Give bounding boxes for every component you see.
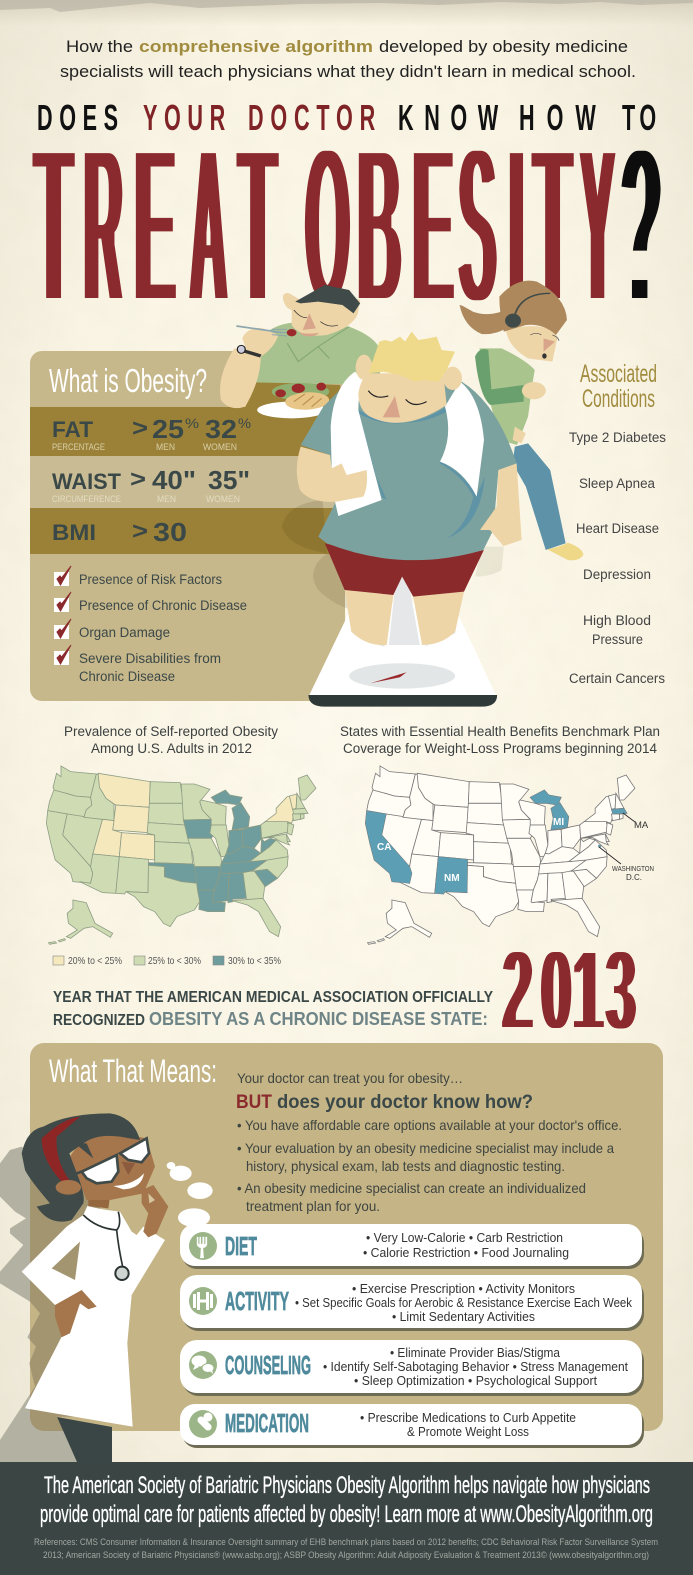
text: COUNSELING (225, 1350, 311, 1380)
intro text: specialists will teach physicians what they didn't learn in medical school. (60, 62, 636, 81)
associated conditions list: Type 2 Diabetes (569, 430, 666, 445)
map title right: Coverage for Weight-Loss Programs beginning 2014 (343, 741, 657, 756)
state labels: D.C. (626, 873, 642, 882)
card details: & Promote Weight Loss (407, 1424, 529, 1439)
explanation text: treatment plan for you. (246, 1198, 380, 1214)
headline: does your doctor know how to: DOES (37, 98, 118, 138)
state labels: WASHINGTON (612, 866, 654, 873)
figure shadows (282, 500, 504, 610)
big title: treat obesity (35, 99, 662, 353)
man eating (220, 285, 380, 418)
row: fat percentage: % (185, 415, 199, 431)
scale (308, 577, 497, 707)
state labels: NM (444, 873, 460, 884)
card details: • Set Specific Goals for Aerobic & Resistance Exercise Each Week (295, 1295, 632, 1310)
headline: does your doctor know how to: KNOW (398, 98, 498, 138)
row: bmi: BMI (52, 520, 96, 545)
icon: pills (196, 1412, 213, 1432)
footer message (40, 1472, 653, 1528)
icon: dumbbell (193, 1292, 213, 1310)
intro text: How the (66, 37, 133, 56)
doctor head (22, 1113, 168, 1237)
big title: treat obesity: T (35, 99, 72, 353)
card details: • Sleep Optimization • Psychological Support (354, 1373, 597, 1388)
big title: treat obesity: I (510, 99, 523, 353)
headline: does your doctor know how to: YOUR (143, 98, 225, 138)
row: bmi (52, 517, 187, 547)
row: waist circumference: WOMEN (206, 494, 240, 504)
map title left: Among U.S. Adults in 2012 (91, 741, 252, 756)
checklist (54, 566, 247, 684)
map title left: Prevalence of Self-reported Obesity (64, 724, 278, 739)
big title: treat obesity: B (358, 99, 401, 353)
map title right (340, 724, 660, 756)
legend: 20% to < 25% (68, 955, 122, 967)
explanation text: • An obesity medicine specialist can create an individualized (237, 1180, 586, 1196)
card: diet (180, 1224, 644, 1269)
footer banner (0, 1462, 693, 1575)
year statement: YEAR THAT THE AMERICAN MEDICAL ASSOCIATION OFFICIALLY (53, 989, 494, 1006)
big title: treat obesity: R (84, 99, 122, 353)
map: obesity prevalence by state (46, 766, 316, 944)
state labels: CA (377, 842, 391, 853)
card: counseling (180, 1340, 644, 1396)
associated conditions list: High Blood (583, 613, 651, 628)
doctor legs (57, 1417, 112, 1462)
checklist: Severe Disabilities from (79, 651, 221, 666)
associated conditions list: Certain Cancers (569, 671, 665, 686)
headline: does your doctor know how to: HOW (519, 98, 596, 138)
checklist: Presence of Chronic Disease (79, 598, 247, 613)
explanation text: • Your evaluation by an obesity medicine specialist may include a (237, 1140, 614, 1156)
checklist: Chronic Disease (79, 669, 175, 684)
legend (53, 955, 281, 967)
row: fat percentage (52, 414, 251, 452)
year statement: OBESITY AS A CHRONIC DISEASE STATE: (149, 1009, 488, 1029)
doctor shadow (0, 1147, 100, 1462)
big title: treat obesity: E (135, 99, 175, 353)
associated conditions list (569, 360, 666, 686)
card labels (225, 1231, 311, 1438)
man on scale: torso, towel and head (297, 332, 522, 560)
row: waist circumference: 40" (152, 465, 196, 495)
icon: speech bubbles (192, 1356, 214, 1374)
headline: does your doctor know how to (37, 98, 656, 138)
stethoscope (83, 1212, 129, 1280)
intro text: comprehensive algorithm (139, 37, 373, 56)
panel: what that means (30, 1043, 663, 1431)
card details: • Calorie Restriction • Food Journaling (363, 1245, 569, 1260)
card details: • Exercise Prescription • Activity Monitors (352, 1281, 575, 1296)
big title: treat obesity: E (413, 99, 453, 353)
row: fat percentage: 25 (152, 414, 184, 444)
row: fat percentage: FAT (52, 417, 94, 442)
associated conditions list: Pressure (592, 632, 643, 647)
explanation text: • You have affordable care options available at your doctor's office. (237, 1117, 622, 1133)
card: activity (180, 1275, 644, 1331)
associated conditions list: Heart Disease (576, 521, 659, 536)
big title: treat obesity: S (459, 99, 496, 353)
row: waist circumference: WAIST (52, 469, 122, 494)
card details: • Identify Self-Sabotaging Behavior • Stress Management (323, 1359, 628, 1374)
card labels: DIET (225, 1231, 257, 1261)
card details: • Limit Sedentary Activities (392, 1309, 535, 1324)
row: waist circumference: > (130, 466, 146, 493)
woman jogging (460, 281, 583, 560)
row: fat percentage: PERCENTAGE (52, 442, 105, 452)
row: bmi: 30 (153, 517, 187, 547)
explanation text (236, 1070, 622, 1214)
card: medication (180, 1404, 644, 1448)
doctor coat (22, 1206, 165, 1427)
row: waist circumference (52, 465, 250, 504)
card labels: ACTIVITY (225, 1286, 289, 1316)
row: bmi: > (132, 518, 148, 545)
associated conditions list: Sleep Apnea (579, 476, 655, 491)
legend: 30% to < 35% (228, 955, 281, 967)
checklist: Presence of Risk Factors (79, 572, 222, 587)
card labels: MEDICATION (225, 1408, 309, 1438)
panel heading: What That Means: (49, 1053, 217, 1089)
row: waist circumference: CIRCUMFERENCE (52, 494, 121, 504)
state labels (377, 813, 654, 884)
associated conditions list: Depression (583, 567, 651, 582)
explanation text: Your doctor can treat you for obesity… (237, 1070, 463, 1086)
row: fat percentage: > (132, 415, 148, 442)
headline: does your doctor know how to: TO (622, 98, 656, 138)
year statement: RECOGNIZED (53, 1012, 145, 1029)
row: fat percentage: % (238, 415, 251, 431)
state labels: MI (553, 817, 564, 828)
big year 2013: 2013 (503, 926, 635, 1056)
big title: treat obesity: T (534, 99, 571, 353)
big title: treat obesity: T (239, 99, 276, 353)
row: fat percentage: 32 (205, 414, 237, 444)
references (34, 1537, 658, 1561)
map: benefit coverage states (365, 766, 654, 944)
card details: • Eliminate Provider Bias/Stigma (390, 1345, 561, 1360)
explanation text: BUT (236, 1092, 272, 1113)
card details: • Prescribe Medications to Curb Appetite (360, 1410, 576, 1425)
card details (295, 1230, 632, 1439)
explanation text: does your doctor know how? (277, 1092, 533, 1113)
row: fat percentage: MEN (156, 442, 175, 452)
panel: what is obesity (30, 351, 345, 701)
big title: treat obesity: O (306, 99, 350, 353)
row: fat percentage: WOMEN (203, 442, 237, 452)
checklist: Organ Damage (79, 625, 170, 640)
map title left (64, 724, 278, 756)
intro text: developed by obesity medicine (379, 37, 628, 56)
row: waist circumference: 35" (208, 465, 250, 495)
year statement (53, 989, 494, 1029)
legend: 25% to < 30% (148, 955, 201, 967)
headline: does your doctor know how to: DOCTOR (248, 98, 375, 138)
big title: treat obesity: A (190, 99, 227, 353)
man on scale: legs and shorts (325, 543, 484, 645)
state labels: MA (634, 820, 649, 831)
doctor illustration (22, 1113, 213, 1462)
row: waist circumference: MEN (157, 494, 176, 504)
panel heading: What is Obesity? (49, 362, 207, 399)
explanation text: history, physical exam, lab tests and diagnostic testing. (246, 1158, 565, 1174)
card details: • Very Low-Calorie • Carb Restriction (366, 1230, 563, 1245)
illustration: three characters and scale (220, 281, 583, 707)
highlighted states (365, 790, 627, 894)
map title right: States with Essential Health Benefits Benchmark Plan (340, 724, 660, 739)
intro text (60, 37, 636, 81)
icon: fork (197, 1237, 207, 1258)
thought bubbles (167, 1162, 213, 1227)
